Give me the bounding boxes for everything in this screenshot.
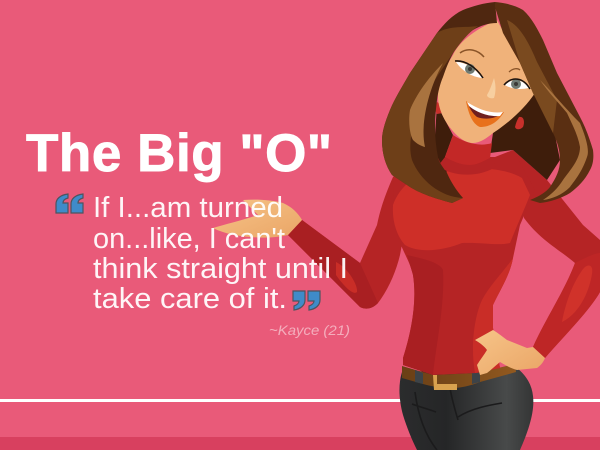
quote text: take care of it. — [93, 283, 287, 315]
hair left lock — [382, 2, 497, 203]
quote text: think straight until I — [93, 253, 348, 285]
eyes — [456, 62, 482, 78]
footer band — [0, 437, 600, 450]
earrings — [435, 102, 443, 114]
dark hair behind neck — [434, 93, 560, 180]
pants — [399, 368, 533, 450]
brows — [460, 50, 484, 57]
akimbo arm — [513, 150, 600, 358]
quote text: If I...am turned — [93, 192, 283, 224]
title: The Big "O" — [26, 124, 332, 183]
turtleneck — [445, 135, 492, 165]
belt — [402, 364, 516, 390]
raised arm — [288, 177, 410, 309]
mouth — [466, 101, 504, 127]
attribution: ~Kayce (21) — [269, 322, 350, 338]
nose highlight — [487, 78, 496, 98]
quote text — [93, 192, 348, 315]
quote text: on...like, I can't — [93, 223, 285, 255]
chest highlight — [393, 165, 530, 250]
torso shading — [403, 255, 443, 375]
woman illustration — [213, 2, 600, 450]
hair right lock — [495, 2, 593, 203]
open hand — [213, 200, 302, 238]
torso — [393, 150, 535, 375]
hand on hip — [475, 330, 545, 375]
face — [438, 20, 535, 143]
icon: opening quotation marks — [56, 194, 83, 213]
white divider line — [0, 399, 600, 402]
icon: closing quotation marks — [293, 291, 320, 310]
